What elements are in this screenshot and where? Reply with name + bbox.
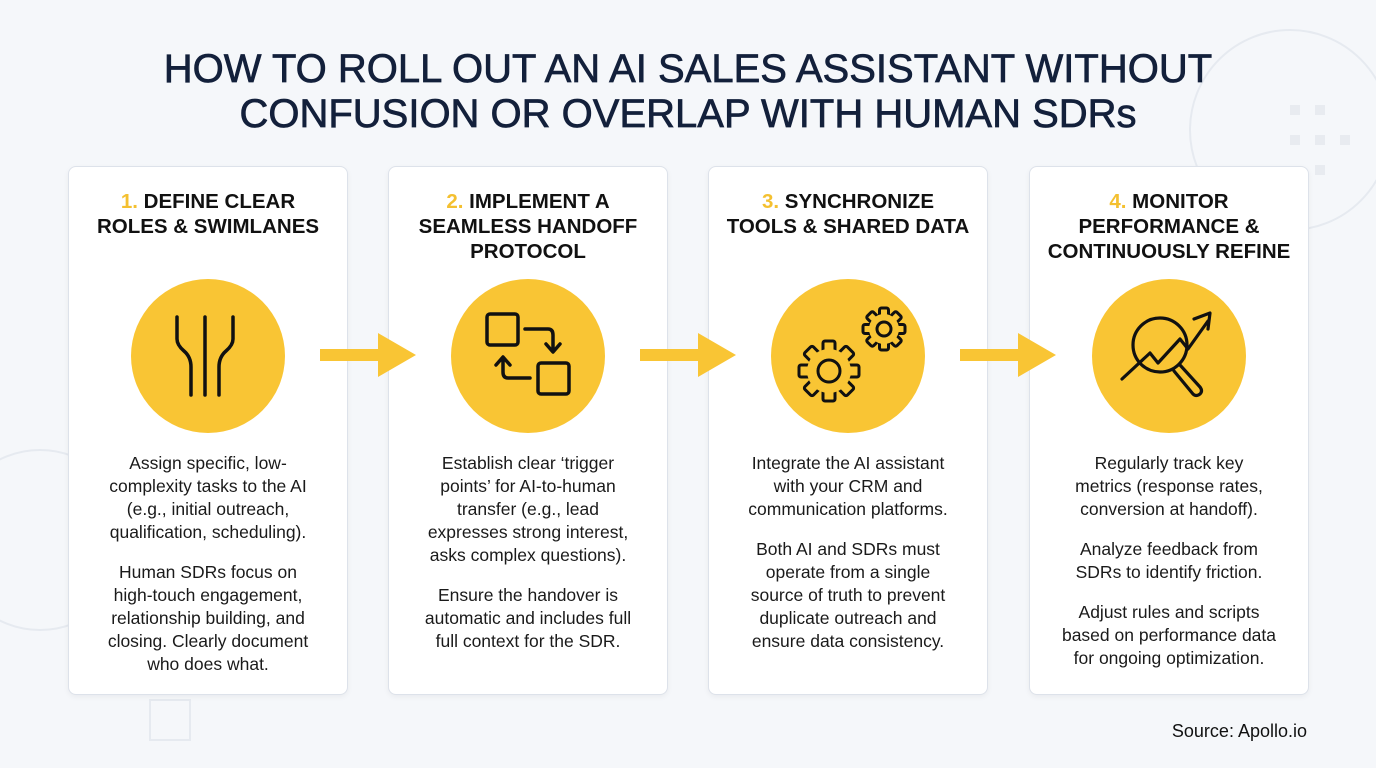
heading 4: CONTINUOUSLY REFINE (1048, 240, 1290, 263)
panel: step 4 (1029, 166, 1309, 695)
text 1: Human SDRs focus on (119, 562, 297, 582)
text 2 (425, 453, 631, 651)
text 2: Ensure the handover is (438, 585, 618, 605)
text 3 (748, 453, 948, 651)
arrow 2 (640, 333, 736, 377)
text 3: with your CRM and (774, 476, 922, 496)
text 1: Assign specific, low- (129, 453, 287, 473)
text 1: (e.g., initial outreach, (127, 499, 289, 519)
text 3: duplicate outreach and (759, 608, 937, 628)
icon: gears (771, 279, 925, 433)
text 2: points’ for AI-to-human (440, 476, 616, 496)
text 3: ensure data consistency. (752, 631, 944, 651)
text 2: expresses strong interest, (428, 522, 628, 542)
text 4: Regularly track key (1095, 453, 1243, 473)
text 3: Both AI and SDRs must (756, 539, 940, 559)
text 4: conversion at handoff). (1080, 499, 1258, 519)
heading 4 (1048, 190, 1290, 263)
icon: handoff (451, 279, 605, 433)
text 2: asks complex questions). (430, 545, 626, 565)
text 3: source of truth to prevent (751, 585, 945, 605)
text 4 (1062, 453, 1276, 668)
heading 3 (726, 190, 969, 238)
heading 2: PROTOCOL (470, 240, 586, 263)
panel: step 1 (68, 166, 348, 695)
text 2: Establish clear ‘trigger (442, 453, 614, 473)
heading 2 (419, 190, 637, 263)
text 4: based on performance data (1062, 625, 1276, 645)
title: HOW TO ROLL OUT AN AI SALES ASSISTANT WITHOUT (164, 47, 1212, 91)
text 2: transfer (e.g., lead (457, 499, 599, 519)
heading 2: SEAMLESS HANDOFF (419, 215, 637, 238)
heading 1 (97, 190, 319, 238)
text 1 (108, 453, 308, 674)
text 1: complexity tasks to the AI (109, 476, 307, 496)
title: CONFUSION OR OVERLAP WITH HUMAN SDRs (239, 92, 1137, 136)
text 3: communication platforms. (748, 499, 948, 519)
heading 3: 3. SYNCHRONIZE (762, 190, 934, 213)
heading 2: 2. IMPLEMENT A (446, 190, 610, 213)
source: Source: Apollo.io (1172, 721, 1307, 741)
panel: step 3 (708, 166, 988, 695)
icon: analytics magnifier (1092, 279, 1246, 433)
text 2: full context for the SDR. (436, 631, 620, 651)
heading 1: 1. DEFINE CLEAR (121, 190, 295, 213)
text 3: operate from a single (766, 562, 930, 582)
text 2: automatic and includes full (425, 608, 631, 628)
heading 4: PERFORMANCE & (1078, 215, 1260, 238)
arrow 1 (320, 333, 416, 377)
text 4: SDRs to identify friction. (1076, 562, 1262, 582)
text 3: Integrate the AI assistant (752, 453, 944, 473)
text 1: closing. Clearly document (108, 631, 308, 651)
heading 3: TOOLS & SHARED DATA (727, 215, 969, 238)
text 4: Adjust rules and scripts (1079, 602, 1259, 622)
title (164, 47, 1212, 136)
panel: step 2 (388, 166, 668, 695)
icon: swimlanes (131, 279, 285, 433)
text 1: who does what. (147, 654, 269, 674)
heading 1: ROLES & SWIMLANES (97, 215, 319, 238)
text 1: relationship building, and (111, 608, 305, 628)
text 4: Analyze feedback from (1080, 539, 1258, 559)
text 4: for ongoing optimization. (1074, 648, 1264, 668)
text 1: high-touch engagement, (114, 585, 302, 605)
heading 4: 4. MONITOR (1109, 190, 1229, 213)
text 4: metrics (response rates, (1075, 476, 1263, 496)
text 1: qualification, scheduling). (110, 522, 306, 542)
arrow 3 (960, 333, 1056, 377)
